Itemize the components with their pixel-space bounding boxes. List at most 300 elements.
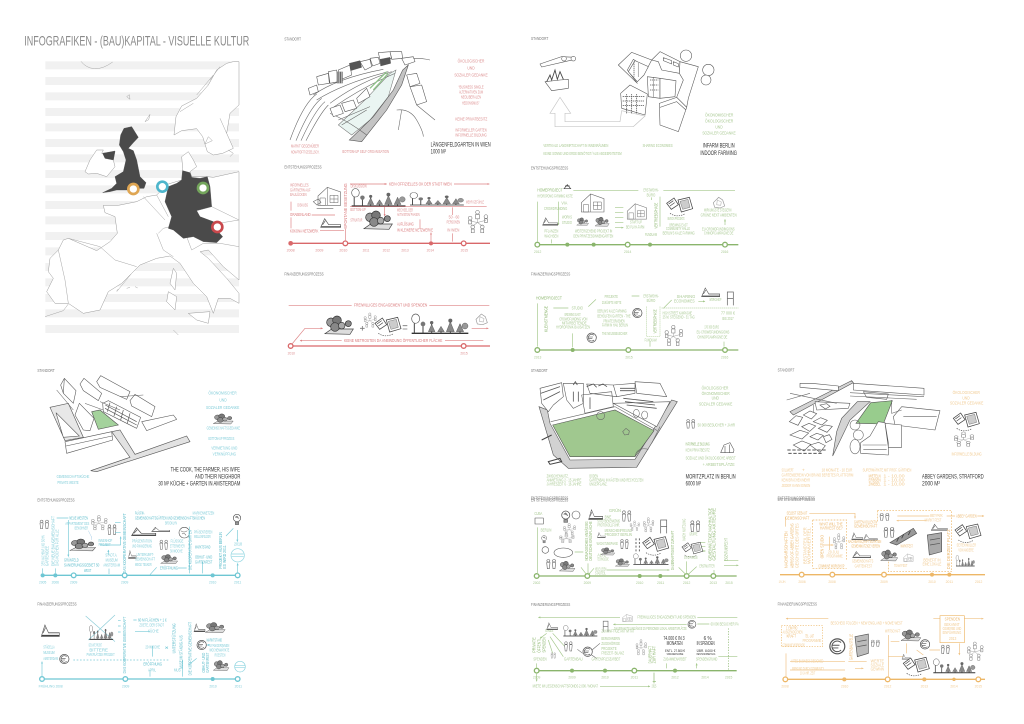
panel: Amsterdam location: STANDORT: [37, 368, 55, 373]
panel: Infarm process timeline: BEHÖLFEN GARTEN - THE: [597, 313, 631, 319]
panel: Wien process timeline: WECHSEL DER: [397, 207, 413, 212]
panel: Infarm process timeline: 2016: [721, 249, 729, 254]
panel: Moritzplatz process timeline: WACHSTUMSPHASE: [597, 541, 618, 546]
panel: Moritzplatz process timeline: NACH NUTZUNG: [681, 518, 686, 541]
panel: Infarm process timeline: VERTRIEBSPHASE: [654, 203, 659, 229]
panel: Amsterdam process timeline: [37, 497, 245, 689]
panel: Abbey Gardens process timeline: 2012: [884, 683, 892, 688]
panel: Abbey Gardens process timeline: GEMEINSCHAFT: [785, 515, 809, 520]
panel: Infarm location: KEINE SONNE UND ERDE BENÖTIGT/ AUS ABGEERNTETEM: [543, 150, 622, 156]
panel: Wien location: INFORMELLER GARTEN: [455, 127, 487, 132]
panel: Wien process timeline: KEINE METROSTEN DA ANBINDUNG ÖFFENTLICHER FLÄCHE: [344, 337, 442, 343]
panel: Amsterdam process timeline: UNTERKUNFT-: [137, 552, 154, 557]
panel: Infarm process timeline: CHINOPCAMPAGNE DE: [704, 231, 733, 236]
panel: Amsterdam location: PRIVATE WESTE: [57, 480, 79, 485]
panel: Wien location: MARKT GEGENÜBER: [291, 143, 319, 149]
panel: Abbey Gardens process timeline: WIRTSCHAFT: [885, 629, 900, 634]
panel: Abbey Gardens location: KEIN BRACHEN MEHR: [782, 478, 810, 483]
panel: Moritzplatz location: ÖKOLOGISCHER: [702, 384, 729, 390]
panel: Amsterdam process timeline: GEMEINSCHAFT: [135, 557, 155, 562]
panel: Infarm process timeline: 2012: [534, 249, 542, 254]
panel: Abbey Gardens process timeline: GARTEN KOLLEKTIV: [854, 519, 878, 524]
panel: Wien process timeline: 2014: [427, 247, 435, 252]
panel: Abbey Gardens process timeline: GARTENFEST: [855, 563, 872, 568]
panel: Amsterdam location: GEMEINSCHAFTSGEDANKE: [207, 426, 240, 431]
panel: Moritzplatz location: GARTENBAU IN KÄSTEN UND RECYCELTEN: [589, 476, 643, 482]
panel: Moritzplatz process timeline: 74.000 € IN 3: [663, 636, 685, 642]
panel: Wien process timeline: AKTIVISTEN/ PHASEN: [397, 212, 420, 217]
panel: Abbey Gardens process timeline: ABBEY GARDEN: [956, 513, 977, 518]
panel: Abbey Gardens process timeline: GESCHICHTE DES ORTES: [794, 523, 799, 568]
panel: Infarm process timeline: WORKSHOP: [709, 297, 721, 302]
panel: Wien process timeline: FINANZIERUNGSPROZESS: [284, 271, 324, 276]
panel: Amsterdam process timeline: FLÜSSIGE: [171, 538, 183, 544]
panel: Abbey Gardens process timeline: MARKT FEST: [925, 518, 941, 523]
panel: Infarm process timeline: 2015: [625, 354, 633, 359]
panel: Moritzplatz location: ANMIETUNG 2 - 15 JAHRE: [547, 477, 581, 482]
panel: Moritzplatz process timeline: 2009: [568, 675, 576, 680]
panel: Abbey Gardens process timeline: GARTENBAUSTELLE: [849, 634, 854, 660]
panel: Moritzplatz location: SOZIALER GEDANKE: [699, 401, 732, 406]
panel: Amsterdam location: 30 M² KÜCHE + GARTEN IN AMSTERDAM: [158, 481, 240, 488]
panel: Infarm process timeline: VERTRIEBSPHASE: [653, 309, 658, 333]
panel: Moritzplatz location: SOZIALE UND ÖKOLOGISCHE ARBEIT: [686, 455, 736, 461]
panel: Moritzplatz process timeline: 2013: [710, 580, 718, 585]
panel: Moritzplatz process timeline: GARTENPFLEGEARBEIT: [592, 657, 620, 662]
panel: Abbey Gardens process timeline: 2006: [798, 579, 806, 584]
panel: Infarm process timeline: ERSTWOHN-: [643, 188, 659, 193]
panel: Moritzplatz process timeline: STADTEIL: [595, 571, 606, 576]
marker: Stratford: [128, 184, 138, 194]
marker: Wien: [212, 222, 222, 232]
marker: Berlin: [198, 183, 208, 193]
panel: Infarm process timeline: VIA: [561, 200, 568, 205]
panel: Moritzplatz location: ÖKONOMISCHER: [702, 390, 730, 396]
panel: Abbey Gardens process timeline: 2014: [950, 683, 958, 688]
panel: Abbey Gardens process timeline: DIE DERZEIT PLATZ: [946, 529, 951, 569]
panel: Moritzplatz process timeline: ERSTMUTTER: [699, 563, 715, 568]
panel: Infarm process timeline: DEN PRINTZESSINNENGÄRTEN: [573, 233, 613, 239]
panel: Amsterdam process timeline: 2009: [121, 579, 129, 584]
panel: Moritzplatz process timeline: TECHNOLOGIE: [597, 557, 609, 562]
panel: Moritzplatz process timeline: 2010: [601, 675, 609, 680]
panel: Amsterdam process timeline: UNTERSTÜTZUNG: [170, 623, 176, 653]
panel: Amsterdam process timeline: BROOKLYN: [165, 521, 177, 526]
panel: Amsterdam process timeline: ERÖFFNUNG: [160, 565, 178, 571]
panel: Infarm process timeline: BIS 2017: [722, 316, 734, 321]
panel: Amsterdam process timeline: ES WIRD 2011: [222, 545, 227, 569]
panel: Infarm process timeline: FINANZIERUNGSPROZESS: [531, 272, 570, 277]
panel: Infarm process timeline: SHARING: [677, 294, 696, 299]
panel: Amsterdam process timeline: BITTERE: [89, 647, 108, 652]
panel: Abbey Gardens process timeline: SOZIALE: [871, 663, 884, 668]
panel: Amsterdam process timeline: GEPLANTE PROJEKT: [89, 643, 102, 648]
panel: Moritzplatz process timeline: [531, 498, 739, 688]
panel: Moritzplatz location: ENTSTEHUNGSPROZESS: [531, 495, 568, 500]
panel: Abbey Gardens process timeline: SEITEN MÜLLER: [957, 542, 976, 548]
panel: Amsterdam location: VERKNÜPFUNG: [213, 450, 236, 456]
panel: Amsterdam location: GEMEINSCHAFTSKÜCHE: [57, 473, 89, 479]
marker: Amsterdam: [157, 182, 167, 192]
panel: Infarm process timeline: STUDIO: [572, 306, 583, 311]
panel: Amsterdam location: [37, 368, 241, 488]
panel: Amsterdam process timeline: WOCHENMÄRKTE: [209, 647, 229, 653]
panel: Wien process timeline: 2013: [401, 247, 409, 252]
panel: Amsterdam location: UND: [219, 397, 227, 402]
panel: Infarm process timeline: 170 300 EURO: [704, 324, 719, 329]
panel: Wien location: INFORMELLE BILDUNG: [455, 132, 487, 137]
panel: Abbey Gardens process timeline: 29 JULI: [828, 549, 839, 554]
panel: Wien location: STANDORT: [284, 37, 301, 42]
panel: Abbey Gardens location: ENTSTEHUNGSPROZESS: [778, 495, 815, 500]
panel: Moritzplatz location: UNGEPFLANZ.: [589, 481, 607, 486]
panel: Wien process timeline: IN WIEN: [447, 227, 459, 232]
panel: Abbey Gardens location: [778, 367, 984, 500]
panel: Wien process timeline: 50 - 60: [449, 214, 460, 219]
panel: Moritzplatz process timeline: ALTE: [597, 553, 606, 558]
panel: Infarm process timeline: WIRKUNGSTE STEIGERN: [704, 208, 731, 213]
panel: europe map: [45, 61, 239, 335]
panel: Abbey Gardens process timeline: 2013: [921, 683, 929, 688]
panel: Moritzplatz location: 6000 M²: [686, 480, 701, 487]
panel: Infarm location: VERTIKALE LANDWIRTSCHAFT IN INNENRÄUMEN: [543, 142, 608, 148]
panel: Abbey Gardens process timeline: WHAT WILL THE: [819, 521, 843, 526]
panel: Wien location: HEDONISMUS”: [462, 101, 480, 106]
panel: Abbey Gardens process timeline: WOHNVIERTEL: [807, 527, 812, 564]
panel: Abbey Gardens process timeline: 1. EIN PRO: [786, 625, 798, 630]
panel: Amsterdam process timeline: STÄDELLA: [43, 643, 55, 649]
panel: Amsterdam process timeline: APPARTEMENT DES: [65, 521, 89, 526]
panel: Abbey Gardens location: MIETELN: [869, 473, 881, 478]
panel: Infarm process timeline: WORKS: [562, 214, 572, 219]
panel: Amsterdam process timeline: 2006: [52, 579, 60, 584]
panel: Wien process timeline: 2008: [287, 247, 295, 252]
panel: Amsterdam process timeline: WEGE TEUKER: [135, 562, 152, 567]
panel: Amsterdam process timeline: NEUE WESTEN: [69, 515, 88, 520]
panel: Amsterdam process timeline: MARKENNETZEN: [193, 511, 214, 516]
panel: Amsterdam process timeline: MARKTSTAND: [207, 637, 222, 642]
panel: Amsterdam process timeline: DAS KOOPERATIVE GEMEINSCHAFT: [122, 617, 127, 673]
panel: Abbey Gardens process timeline: PROGRAMMIE: [803, 638, 821, 643]
panel: Abbey Gardens process timeline: GEMEINSCHAFTS: [852, 559, 873, 564]
panel: Amsterdam process timeline: DIE KOOPERATIVE GEMEINSCHAFT: [187, 622, 192, 675]
panel: Infarm process timeline: [531, 185, 738, 359]
panel: Moritzplatz process timeline: ZUR HAFT: [651, 646, 656, 663]
panel: Abbey Gardens process timeline: 19.JH.: [779, 579, 786, 584]
panel: Moritzplatz location: BODEN: [589, 474, 598, 479]
panel: Amsterdam process timeline: DAS KOCHEN FÜR ALLE: [53, 529, 59, 566]
panel: Infarm process timeline: PROJEKTE: [605, 294, 618, 299]
panel: Moritzplatz process timeline: IN SPENDEN: [697, 641, 715, 647]
panel: Amsterdam process timeline: OBHUT- UND: [201, 652, 206, 673]
panel: Infarm process timeline: FARM IN HAU BERLIN: [602, 322, 628, 327]
panel: Abbey Gardens process timeline: KITES BUSINESS DESIGNED: [791, 659, 824, 664]
panel: Abbey Gardens process timeline: WERTE: [871, 659, 884, 664]
panel: Abbey Gardens process timeline: EINFÜHRUNG: [943, 629, 962, 635]
panel: Infarm process timeline: HIGH STREET KAMPAGNE: [663, 311, 692, 316]
panel: Amsterdam process timeline: ROESTEN: [215, 652, 225, 657]
panel: Amsterdam process timeline: GRÜNFELD: [64, 556, 79, 562]
panel: Wien process timeline: 2012: [383, 247, 391, 252]
panel: Infarm process timeline: CROWDFUNDING VON: [559, 317, 587, 322]
panel: Moritzplatz process timeline: EIGENTUMSRECHT: [723, 538, 728, 561]
panel: Moritzplatz process timeline: MONATEN: [667, 641, 683, 647]
panel: Abbey Gardens process timeline: WIRKUNG DURCH COMMUNITY: [792, 666, 824, 671]
panel: Infarm process timeline: STUDIO: [562, 220, 572, 225]
panel: Wien process timeline: GRABENLAND: [290, 212, 311, 217]
panel: Abbey Gardens process timeline: KRAFT: [787, 633, 796, 638]
panel: Infarm process timeline: 2016: [721, 354, 729, 359]
panel: Abbey Gardens process timeline: NACHBARSCHAFTEN: [783, 531, 788, 568]
panel: Abbey Gardens process timeline: TEAM FEST: [894, 563, 907, 568]
panel: Moritzplatz process timeline: ÜBR. 8.000 €: [697, 648, 716, 653]
panel: Infarm process timeline: EU-CROWDFUNDINGIONS: [702, 226, 735, 231]
panel: Wien location: UND: [467, 65, 475, 70]
panel: Amsterdam process timeline: DIE KOOPERATIVE GARTEN: [187, 530, 192, 570]
panel: Amsterdam process timeline: 2011: [234, 579, 242, 584]
panel: Amsterdam process timeline: WEST: [84, 568, 91, 573]
panel: Moritzplatz process timeline: BEIWOHNERIN: [601, 636, 620, 641]
panel: Abbey Gardens location: ÖKOLOGISCHER: [953, 389, 980, 395]
panel: Wien process timeline: AUFLÖSUNG: [397, 221, 414, 227]
panel: Moritzplatz process timeline: DAUERHAFT: [647, 646, 652, 663]
panel: Moritzplatz location: JAHRESZEIT 6 - 16 JAHRE: [547, 481, 581, 486]
panel: Moritzplatz process timeline: 2009: [584, 580, 592, 585]
panel: Moritzplatz process timeline: SPENDEN: [541, 637, 546, 653]
panel: Amsterdam process timeline: WELLENFELDER: [194, 534, 211, 539]
panel: Infarm process timeline: HOMEPROJECT: [536, 296, 562, 301]
panel: Abbey Gardens location: 2000 M²: [922, 481, 941, 488]
panel: Infarm process timeline: 2013: [534, 354, 542, 359]
panel: Abbey Gardens process timeline: BESTANDTEIL DER: [803, 527, 808, 564]
panel: Infarm process timeline: BERLIN'S KALE FARMING: [597, 308, 627, 313]
panel: Wien process timeline: BAULÜCKEN: [290, 191, 307, 197]
panel: Infarm location: SOZIALER GEDANKE: [702, 130, 736, 135]
panel: Abbey Gardens process timeline: GEMEINSCHAFT: [854, 523, 877, 528]
panel: Infarm process timeline: BEI PLAYA FARM: [626, 224, 644, 229]
panel: Abbey Gardens location: SOLLWERT: [782, 467, 794, 472]
panel: Amsterdam process timeline: MARKTSTAND: [195, 545, 211, 550]
panel: Moritzplatz process timeline: NEUE LEBEN: [595, 567, 606, 572]
panel: Infarm process timeline: HYDROPONIK-BAUSÄTZEN: [556, 324, 590, 330]
panel: Moritzplatz location: + ARBEITSPLÄTZE: [703, 461, 735, 467]
panel: Abbey Gardens process timeline: COMMUNE WORKSHOP: [783, 643, 805, 648]
panel: Amsterdam process timeline: MUSEUM: [43, 650, 55, 655]
panel: Infarm process timeline: ECONOMIES: [674, 299, 695, 304]
panel: Abbey Gardens location: 18 MONATE - 10 EUR: [822, 467, 853, 472]
panel: Moritzplatz process timeline: 2011: [631, 675, 639, 680]
panel: Wien process timeline: BOTTOM-UP: [350, 207, 366, 212]
panel: Abbey Gardens process timeline: 2010: [841, 683, 849, 688]
panel: Wien location: NEOLIBERALEN: [461, 95, 481, 100]
panel: Wien process timeline: KOKONA NETZWERK: [290, 229, 319, 234]
panel: Amsterdam process timeline: DAS KOOPERATIVE GEMEINSCHAFT: [122, 513, 127, 573]
panel: Wien process timeline: INFORMELLES: [290, 183, 309, 188]
panel: Abbey Gardens location: ABBEY GARDENS, STRATFORD: [922, 474, 984, 481]
panel: Abbey Gardens location: STANDORT: [778, 367, 794, 372]
panel: Infarm process timeline: 2014: [624, 249, 632, 254]
panel: Infarm process timeline: BREWING EAST: [669, 222, 688, 227]
panel: Wien process timeline: 2015: [460, 351, 468, 356]
panel: Moritzplatz process timeline: GRUPPE: [689, 532, 697, 537]
panel: Amsterdam location: BOTTOM-UP PROZESS: [208, 436, 234, 441]
panel: Amsterdam process timeline: KÜCHE: [148, 628, 159, 634]
panel: Infarm process timeline: START UP: [630, 219, 642, 224]
panel: Moritzplatz process timeline: ZUGEHÖRIGE: [601, 640, 620, 646]
panel: Wien location: ENTSTEHUNGSPROZESS: [284, 165, 322, 170]
panel: Abbey Gardens process timeline: 2009: [880, 579, 888, 584]
panel: Abbey Gardens process timeline: MIET-PARK: [930, 513, 943, 518]
panel: Moritzplatz process timeline: 2015: [725, 580, 733, 585]
panel: Moritzplatz location: STANDORT: [531, 368, 548, 373]
panel: Wien location: BOTTOM-UP SELF ORGANISATION: [342, 149, 389, 154]
panel: Infarm process timeline: FUNDUAM: [645, 337, 657, 342]
panel: Moritzplatz process timeline: SPENDERSUMME: [667, 652, 683, 656]
panel: Moritzplatz process timeline: PROTOKOLLFÜHR.: [597, 521, 620, 527]
panel: Moritzplatz process timeline: ENTSTEHUNGSPROZESS: [531, 498, 568, 503]
panel: Abbey Gardens process timeline: GEMEINNÜTZIGE VEREIN: [851, 543, 880, 549]
panel: Infarm process timeline: INVEON PROJEKTE: [667, 216, 685, 221]
panel: Moritzplatz process timeline: 2009: [533, 675, 541, 680]
panel: Wien process timeline: FREIWILLIGES ENGAGEMENT UND SPENDEN: [354, 303, 427, 308]
panel: Moritzplatz process timeline: ENTL. 27.500 €: [665, 648, 686, 653]
panel: Wien process timeline: KEIN OFFIZIELLES OK DER STADT WIEN: [389, 181, 452, 186]
panel: Wien process timeline: GÄRTNERN AUF: [290, 186, 311, 192]
panel: Abbey Gardens process timeline: 2015: [975, 683, 983, 688]
panel: Infarm location: ÖKONOMISCHER: [705, 112, 734, 118]
panel: Abbey Gardens location: JEDER KANN EINEN: [782, 483, 810, 488]
panel: Infarm process timeline: PFLANZEN: [544, 229, 558, 234]
panel: Amsterdam process timeline: BEWOHNER: [75, 525, 88, 530]
panel: Moritzplatz process timeline: PRIVATE: [531, 637, 536, 653]
panel: Wien process timeline: 2010: [288, 351, 296, 356]
panel: Infarm process timeline: KLEINSTMENGE: [544, 306, 549, 332]
panel: Wien location: [284, 37, 491, 170]
panel: Infarm process timeline: COMMUNITY HALLE: [666, 226, 690, 231]
panel: Amsterdam process timeline: 2005: [39, 579, 47, 584]
panel: Abbey Gardens process timeline: PROGRAMMIE: [827, 554, 843, 559]
panel: Abbey Gardens process timeline: 2008: [781, 683, 789, 688]
panel: Infarm location: UND: [715, 124, 723, 129]
panel: Wien location: KEINE PRIVATBESITZ: [455, 116, 487, 121]
panel: Abbey Gardens process timeline: HARVEST BE?: [820, 526, 843, 531]
panel: Abbey Gardens process timeline: 2012: [975, 579, 983, 584]
panel: Moritzplatz location: ZWISCHENNUTZ.: [547, 474, 569, 479]
panel: Amsterdam process timeline: STADT.A.: [105, 553, 117, 558]
panel: Amsterdam process timeline: GEMEINSCHAFTSGÄRTEN UND GEMEINSCHAFTSKÜCHEN: [135, 514, 205, 520]
panel: Moritzplatz location: [531, 368, 736, 500]
panel: Amsterdam process timeline: PALÄSTINA: [135, 510, 145, 516]
panel: Infarm location: ÖKOLOGISCHER: [705, 117, 734, 123]
panel: Moritzplatz process timeline: 2002: [533, 580, 541, 585]
panel: Moritzplatz process timeline: BERLIN: [541, 527, 551, 532]
panel: Infarm location: SHARING ECONOMIES: [643, 143, 673, 148]
panel: Infarm location: STANDORT: [531, 36, 548, 41]
panel: Amsterdam process timeline: GARTENIDEE: [44, 546, 49, 566]
panel: Moritzplatz process timeline: MIETE IM LIEGENSCHAFTSFONDS 2.000 / MONAT: [533, 683, 598, 688]
panel: Amsterdam location: ÖKONOMISCHER: [208, 390, 237, 396]
panel: Infarm process timeline: GRÜNE NEXT AMBIENTEN: [701, 211, 737, 217]
panel: Moritzplatz process timeline: SPENDENGRUND: [696, 657, 718, 662]
panel: Moritzplatz process timeline: BEISTANDSBEITRAG: [697, 652, 716, 656]
panel: Abbey Gardens location: UND: [962, 395, 970, 400]
panel: Moritzplatz process timeline: PROJEKTE: [601, 646, 617, 651]
panel: Abbey Gardens process timeline: MARKTFEST: [901, 544, 913, 549]
panel: Amsterdam location: VERMIETUNG UND: [211, 445, 238, 450]
panel: Moritzplatz process timeline: FREIZEIT- BILANZ: [601, 651, 624, 656]
panel: Amsterdam location: AND THEIR NEIGHBOR: [195, 474, 241, 480]
panel: Wien process timeline: PERSONEN: [447, 219, 460, 224]
panel: Moritzplatz location: UND: [712, 396, 719, 401]
panel: Wien process timeline: 2010: [339, 247, 348, 252]
panel: Amsterdam location: THE COOK, THE FARMER, HIS WIFE: [171, 468, 240, 474]
panel: Amsterdam process timeline: PRÄSENTATION: [132, 538, 152, 544]
panel: Abbey Gardens process timeline: BENEFIT IN: [923, 557, 941, 562]
panel: Moritzplatz process timeline: GEMEINNÜTZIGE NACHHALTIGE: [707, 508, 713, 561]
panel: Abbey Gardens process timeline: GEWERBE UND: [943, 626, 962, 631]
panel: Amsterdam process timeline: DIE NEUE BAUGEMEINSCHAFT: [50, 516, 55, 566]
panel: Amsterdam process timeline: PRÄSENTIEREN: [194, 528, 212, 534]
panel: Amsterdam process timeline: APRIL: [148, 667, 156, 672]
panel: Infarm process timeline: 25 M. STEIGEND - 31 TAG: [663, 315, 695, 320]
panel: Wien process timeline: 2011: [363, 247, 370, 252]
panel: Moritzplatz location: 50 000 BESUCHER + JAHR: [698, 423, 735, 428]
panel: Abbey Gardens process timeline: AUSGEWOGENEN: [783, 629, 803, 634]
panel: Amsterdam process timeline: GARTENFEST: [205, 653, 210, 673]
panel: Infarm location: ENTSTEHUNGSPROZESS: [531, 165, 568, 170]
panel: Moritzplatz process timeline: GESTALTUNG AKTEURE: [711, 508, 716, 561]
panel: Abbey Gardens process timeline: FINANZIERUNGSPROZESS: [778, 602, 817, 607]
panel: Abbey Gardens process timeline: 10 JAHR. ZEIT: [800, 670, 815, 675]
panel: Abbey Gardens location: SOZIALER GEDANKE: [950, 400, 983, 405]
panel: Abbey Gardens process timeline: 2013: [949, 636, 957, 641]
panel: Moritzplatz process timeline: 2011: [657, 580, 665, 585]
panel: Wien process timeline: DISKUSSION: [351, 184, 367, 189]
panel: Amsterdam process timeline: UND FINANZIERUNG: [132, 543, 152, 548]
panel: Amsterdam process timeline: SANIERUNGSGEBIET 50: [64, 562, 100, 567]
panel: Wien process timeline: [284, 181, 490, 356]
panel: Amsterdam process timeline: ZOETE, DER STADT: [139, 623, 164, 628]
panel: Amsterdam process timeline: ERÖFFNUNG: [143, 661, 162, 667]
panel: Amsterdam process timeline: 2018: [234, 541, 242, 546]
panel: Infarm location: [531, 36, 737, 170]
title: INFOGRAFIKEN - (BAU)KAPITAL - VISUELLE KULTUR: [24, 32, 249, 48]
panel: Moritzplatz process timeline: STADT GRÜN: [684, 554, 697, 560]
panel: Amsterdam process timeline: FINANZIERUNGSPROZESS: [37, 602, 77, 607]
panel: Infarm process timeline: WACHSEN: [544, 233, 558, 238]
panel: Infarm process timeline: THE NEUSSBUECHER: [602, 331, 628, 336]
panel: Moritzplatz process timeline: FINANZIERUNGSPROZESS: [531, 602, 570, 607]
panel: Abbey Gardens process timeline: SELBST GEBAUT: [787, 511, 807, 516]
panel: Moritzplatz process timeline: PROJEKT BERLIN: [605, 532, 632, 537]
panel: Moritzplatz process timeline: 2015: [725, 675, 733, 680]
panel: Moritzplatz process timeline: 2012: [671, 675, 679, 680]
panel: Amsterdam process timeline: PROJEKT AUS BERLIN: [218, 532, 223, 569]
panel: Infarm process timeline: WEITERGEHEND PROJEKT IN: [575, 229, 612, 234]
panel: Amsterdam process timeline: 20 WOCHE: [145, 645, 160, 650]
panel: Amsterdam process timeline: GARTENFEST: [195, 559, 212, 564]
panel: Moritzplatz process timeline: DEUTSCHE GRÜNFLÄCHE: [587, 521, 593, 561]
panel: Abbey Gardens process timeline: BEKANNT: [944, 622, 960, 627]
panel: Abbey Gardens process timeline: GEWINN: [871, 667, 884, 672]
panel: Amsterdam process timeline: 2011: [235, 684, 243, 689]
panel: Infarm process timeline: BÜRO: [647, 297, 656, 303]
panel: Amsterdam process timeline: AMSTERDAM: [43, 656, 58, 661]
panel: Moritzplatz process timeline: 2015: [652, 683, 657, 688]
panel: Abbey Gardens process timeline: [778, 497, 985, 688]
panel: Infarm process timeline: PRIVATE BRAEMEN: [603, 318, 625, 323]
panel: Moritzplatz location: KEIN PRIVATBESITZ: [686, 448, 710, 453]
